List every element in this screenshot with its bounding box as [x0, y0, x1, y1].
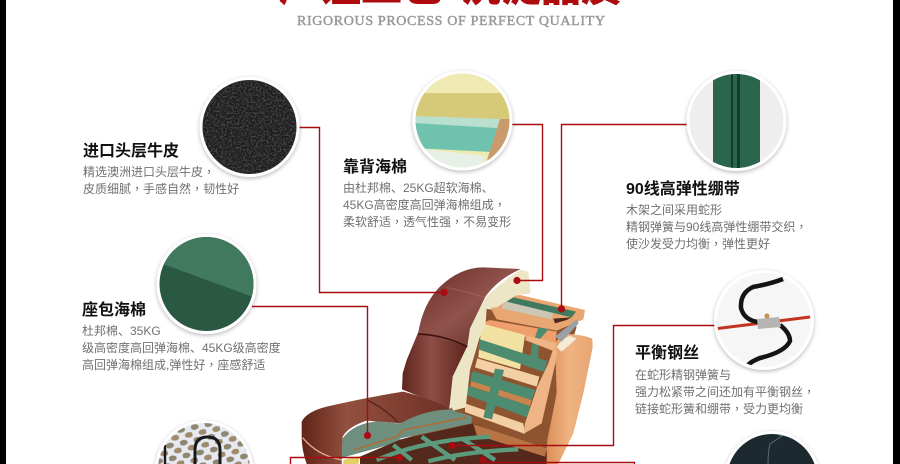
callout line: bottom left: [290, 458, 399, 464]
text block: back foam: 靠背海棉: [343, 158, 407, 176]
icon: leather swatch: [200, 77, 300, 178]
leather backrest: [402, 332, 467, 408]
side panel: [545, 334, 593, 464]
front frame wood: [523, 348, 557, 434]
text block: webbing: [626, 179, 807, 252]
right black edge: [893, 0, 900, 464]
sofa interior wood: [363, 308, 577, 464]
text block: leather: 进口头层牛皮: [83, 142, 179, 160]
text block: balance wire: 强力松紧带之间还加有平衡钢丝，: [635, 383, 815, 400]
text block: leather: 皮质细腻，手感自然，韧性好: [83, 180, 239, 197]
seat webbing: [343, 456, 360, 464]
text block: balance wire: [635, 343, 815, 417]
callout line: bottom right: [483, 462, 634, 464]
top webbing strap: [507, 297, 576, 317]
cream foam edge of backrest: [449, 270, 531, 411]
yellow back foam block: [478, 323, 525, 369]
text block: seat foam: [82, 300, 281, 373]
top frame: [490, 295, 585, 331]
text block: seat foam: 高回弹海棉组成,弹性好，座感舒适: [82, 356, 265, 373]
text block: seat foam: 杜邦棉、35KG: [82, 323, 161, 338]
text block: webbing: 精钢弹簧与90线高弹性绷带交织，: [626, 218, 807, 235]
text block: webbing: 使沙发受力均衡，弹性更好: [626, 235, 770, 252]
text block: back foam: 由杜邦棉、25KG超软海棉、: [343, 180, 494, 195]
text block: seat foam: 级高密度高回弹海棉、45KG级高密度: [82, 340, 281, 355]
text block: leather: [83, 142, 239, 197]
text block: back foam: 柔软舒适，透气性强，不易变形: [343, 213, 511, 230]
callout line: leather: [298, 128, 444, 292]
text block: webbing: 木架之间采用蛇形: [626, 202, 722, 217]
text block: balance wire: 链接蛇形簧和绷带，受力更均衡: [635, 400, 803, 417]
icon: dark fabric: [725, 430, 819, 464]
icon: honeycomb spring: [155, 420, 254, 464]
text block: balance wire: 平衡钢丝: [635, 343, 699, 362]
green straps: [467, 328, 549, 419]
text block: back foam: [343, 158, 511, 230]
metal bracket: [555, 319, 579, 342]
callout line: back foam: [509, 124, 542, 280]
leather headrest: [418, 267, 521, 346]
text block: leather: 精选澳洲进口头层牛皮，: [83, 163, 215, 180]
text block: balance wire: 在蛇形精钢弹簧与: [635, 367, 731, 382]
subtitle: RIGOROUS PROCESS OF PERFECT QUALITY: [297, 14, 605, 29]
leather seat: [302, 392, 451, 464]
text block: webbing: 90线高弹性绷带: [626, 179, 740, 198]
callout dots: [364, 277, 565, 464]
icon: seat foam: [156, 234, 256, 334]
icon: balance wire: [714, 270, 814, 370]
callout line: seat foam: [252, 306, 368, 435]
wooden slats: [475, 358, 539, 387]
text block: seat foam: 座包海棉: [82, 300, 146, 319]
text block: back foam: 45KG高密度高回弹海棉组成，: [343, 196, 506, 213]
callout line: webbing: [562, 124, 689, 309]
icon: back foam layers: [412, 70, 512, 170]
callout line: balance wire: [452, 326, 716, 446]
sofa cutaway illustration: [302, 267, 593, 464]
icon: green webbing: [686, 71, 786, 171]
left black edge: [0, 0, 6, 464]
teal seat foam: [342, 409, 472, 458]
